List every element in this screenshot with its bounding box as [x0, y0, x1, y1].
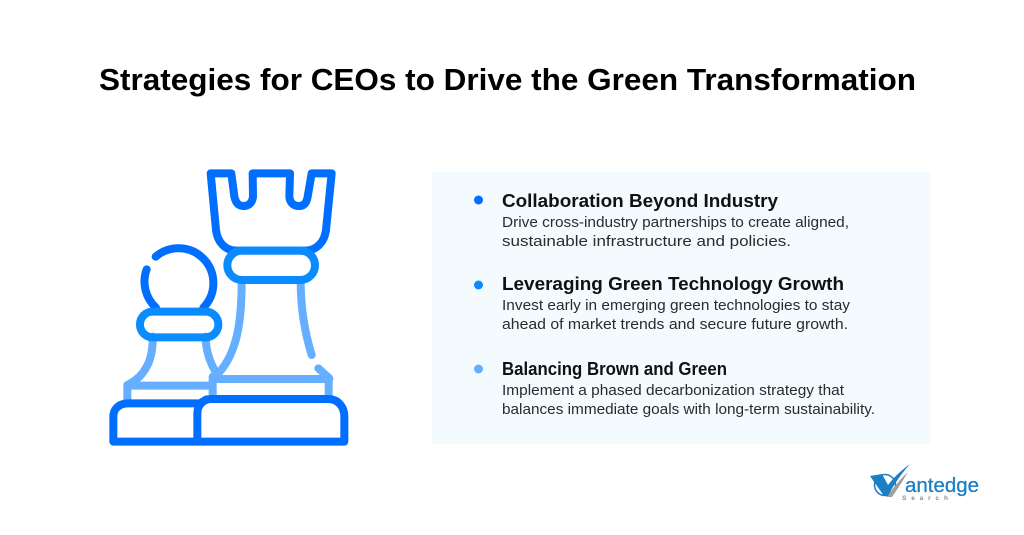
logo tagline: Search: [902, 495, 948, 502]
description: Drive cross-industry partnerships to create aligned,: [502, 214, 849, 231]
item: balancing brown and green: [474, 358, 875, 418]
description: [502, 382, 875, 418]
description: ahead of market trends and secure future growth.: [502, 316, 848, 333]
heading: Collaboration Beyond Industry: [502, 190, 779, 211]
bullet: [474, 280, 483, 290]
heading: Leveraging Green Technology Growth: [502, 273, 844, 294]
bullet: [474, 364, 483, 374]
description: Implement a phased decarbonization strategy that: [502, 382, 845, 399]
description: [502, 214, 849, 250]
description: sustainable infrastructure and policies.: [502, 233, 791, 250]
heading: Balancing Brown and Green: [502, 358, 727, 379]
description: [502, 297, 851, 333]
icon: chess rook and pawn: [113, 173, 344, 442]
item: collaboration beyond industry: [474, 190, 849, 250]
title: Strategies for CEOs to Drive the Green Transformation: [99, 62, 916, 97]
logo: Vantedge Search: [870, 464, 979, 502]
logo mark: [870, 464, 910, 497]
description: balances immediate goals with long-term sustainability.: [502, 401, 875, 418]
panel: strategies: [432, 172, 930, 444]
logo wordmark: antedge: [905, 475, 979, 497]
bullet: [474, 196, 483, 204]
item: leveraging green technology growth: [474, 273, 851, 333]
description: Invest early in emerging green technologies to stay: [502, 297, 851, 314]
